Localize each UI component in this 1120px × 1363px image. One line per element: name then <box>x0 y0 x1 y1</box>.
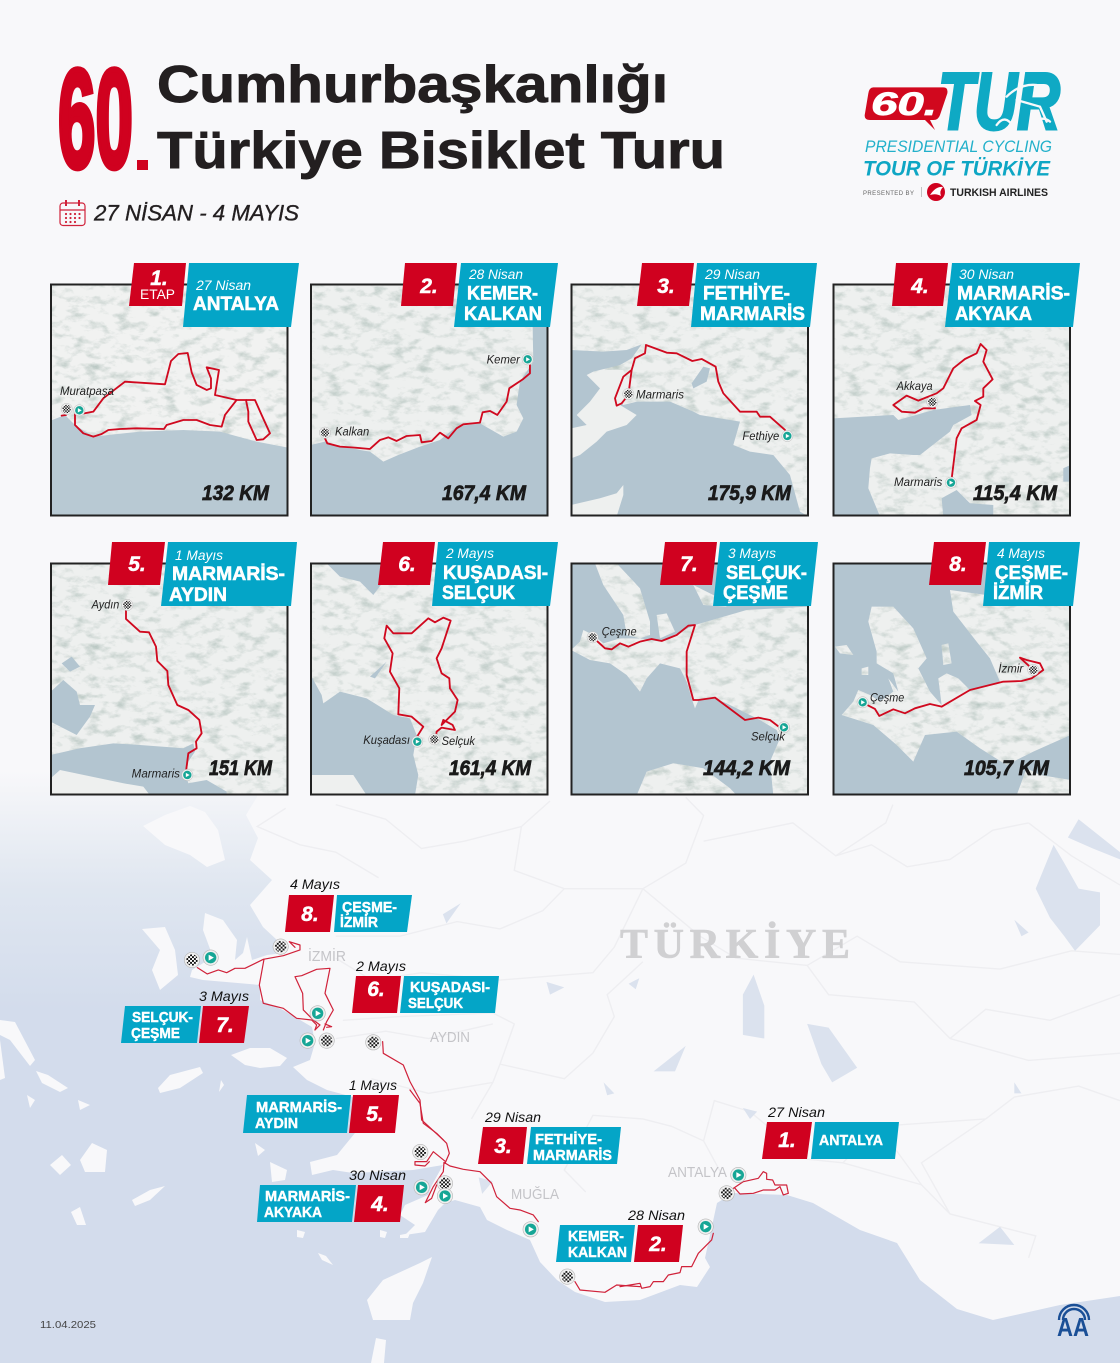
distance 5: 151 KM <box>209 757 272 780</box>
distance 1: 132 KM <box>202 482 269 505</box>
map: stage 1: Muratpaşa <box>60 384 114 398</box>
distance 4: 115,4 KM <box>973 482 1057 505</box>
overview label: stage 7: 7. <box>216 1014 234 1037</box>
overview label: stage 2: 28 Nisan <box>627 1207 685 1223</box>
overview label: stage 7: 3 Mayıs <box>199 988 249 1004</box>
stage badge 3 <box>637 263 694 306</box>
country name: Türkiye: TÜRKİYE <box>620 921 850 968</box>
stage tab 8 <box>983 542 1080 606</box>
distance 2: 167,4 KM <box>442 482 526 505</box>
overview label: stage 1: 27 Nisan <box>767 1104 825 1120</box>
map: stage 4: Akkaya <box>896 379 933 393</box>
panel: stage 4 Marmaris-Akyaka <box>833 263 1080 516</box>
stage badge 1: ETAP <box>140 286 175 302</box>
stage tab 3: FETHİYE- <box>703 284 790 304</box>
stage tab 5: 1 Mayıs <box>175 547 223 563</box>
stage tab 5: MARMARİS- <box>172 564 285 585</box>
map: stage 6 <box>311 563 548 795</box>
overview label: stage 8: İZMİR <box>340 914 378 931</box>
stage badge 7 <box>660 542 717 585</box>
title: edition number <box>58 40 148 197</box>
province borders and lakes <box>257 797 1120 1258</box>
overview routes: stages 1 and 2 <box>620 1167 788 1288</box>
overview label: stage 1 <box>762 1104 899 1159</box>
overview routes: stages 3 and 4 <box>410 1090 640 1292</box>
stage badge 6: 6. <box>398 553 416 576</box>
stage badge 7: 7. <box>680 553 698 576</box>
overview label: stage 4: 30 Nisan <box>349 1167 406 1183</box>
panel: stage 8 Çeşme-İzmir <box>833 542 1080 795</box>
overview label: stage 1: ANTALYA <box>819 1132 883 1149</box>
region name: İzmir: İZMİR <box>308 947 346 965</box>
stage badge 6 <box>378 542 435 585</box>
overview label: stage 3 <box>478 1109 621 1164</box>
overview label: stage 8: 8. <box>301 903 319 926</box>
stage tab 6: KUŞADASI- <box>443 563 548 584</box>
overview label: stage 5: MARMARİS- <box>256 1099 342 1116</box>
Greek islands <box>0 806 432 1363</box>
stage badge 1: 1. <box>150 267 168 290</box>
map: stage 7 <box>571 563 808 795</box>
stage tab 6 <box>432 542 558 606</box>
map: stage 8: İzmir <box>998 661 1024 675</box>
stage tab 8: İZMİR <box>993 583 1043 604</box>
map: stage 7: Çeşme <box>602 625 637 639</box>
overview label: stage 1: 1. <box>778 1129 796 1152</box>
overview label: stage 8: 4 Mayıs <box>290 876 340 892</box>
map: stage 7: Selçuk <box>751 730 786 744</box>
stage tab 5 <box>161 542 297 606</box>
overview label: stage 8 <box>285 876 412 932</box>
logo: Tour of Türkiye: TOUR OF TÜRKİYE <box>863 158 1051 180</box>
map: stage 4 <box>833 284 1071 516</box>
region name: Aydın: AYDIN <box>430 1029 470 1046</box>
logo: Tour of Türkiye <box>863 57 1060 201</box>
icon: calendar <box>60 200 85 226</box>
stage tab 4: 30 Nisan <box>959 266 1014 282</box>
stage tab 3: MARMARİS <box>700 304 805 325</box>
overview label: stage 7: ÇEŞME <box>131 1025 180 1042</box>
logo: Tour of Türkiye: PRESENTED BY <box>863 191 914 197</box>
panel: stage 1 Antalya <box>51 263 299 516</box>
overview label: stage 6: 2 Mayıs <box>355 958 406 974</box>
distance 7: 144,2 KM <box>703 757 790 780</box>
stage tab 1 <box>183 263 299 327</box>
stage tab 7 <box>713 542 818 606</box>
map: stage 5 <box>51 563 288 795</box>
region name: Antalya: ANTALYA <box>668 1164 727 1181</box>
stage tab 4: MARMARİS- <box>957 284 1070 304</box>
stage badge 4 <box>892 263 948 306</box>
stage tab 2: KEMER- <box>467 284 538 304</box>
map: stage 5: Marmaris <box>132 767 180 781</box>
logo: Tour of Türkiye: TUR <box>938 57 1060 147</box>
date stamp: 11.04.2025 <box>40 1319 96 1331</box>
map: stage 2: Kalkan <box>335 425 370 439</box>
stage badge 5 <box>108 542 165 585</box>
map: stage 1 <box>51 284 288 516</box>
overview label: stage 8: ÇEŞME- <box>342 899 397 916</box>
stage tab 7: 3 Mayıs <box>728 545 776 561</box>
stage badge 8 <box>929 542 986 585</box>
stage tab 6: SELÇUK <box>442 583 515 604</box>
panel: stage 5 Marmaris-Aydın <box>51 542 297 795</box>
overview label: stage 4: MARMARİS- <box>265 1188 350 1205</box>
overview label: stage 5 <box>243 1077 399 1133</box>
title: main heading: Cumhurbaşkanlığı <box>157 56 668 114</box>
stage tab 4: AKYAKA <box>955 304 1032 325</box>
stage tab 8: ÇEŞME- <box>995 563 1068 584</box>
stage badge 2: 2. <box>419 275 438 298</box>
stage badge 2 <box>401 263 457 306</box>
stage badge 4: 4. <box>910 275 929 298</box>
logo: Tour of Türkiye: PRESIDENTIAL CYCLING <box>865 137 1052 156</box>
logo: Anadolu Agency: AA <box>1057 1312 1089 1342</box>
stage tab 7: SELÇUK- <box>726 563 807 584</box>
stage tab 1: ANTALYA <box>193 294 279 315</box>
map: stage 8 <box>833 563 1071 795</box>
overview label: stage 5: 5. <box>366 1103 384 1126</box>
overview label: stage 4 <box>257 1167 406 1222</box>
panel: stage 2 Kemer-Kalkan <box>311 263 558 516</box>
distance 6: 161,4 KM <box>449 757 531 780</box>
map: stage 2 <box>311 284 548 516</box>
overview label: stage 2: KALKAN <box>568 1244 627 1261</box>
overview label: stage 3: 3. <box>494 1135 512 1158</box>
overview label: stage 3: MARMARİS <box>533 1147 612 1164</box>
map: stage 3 <box>571 284 808 516</box>
overview label: stage 3: FETHİYE- <box>535 1131 602 1148</box>
map: stage 2: Kemer <box>487 352 521 366</box>
overview label: stage 6: 6. <box>367 978 385 1001</box>
map: stage 3: Fethiye <box>742 429 780 443</box>
stage badge 5: 5. <box>128 553 146 576</box>
overview label: stage 2: KEMER- <box>568 1228 624 1245</box>
stage tab 2: KALKAN <box>464 304 542 325</box>
distance 8: 105,7 KM <box>964 757 1049 780</box>
date range: 27 NİSAN - 4 MAYIS <box>93 200 299 226</box>
stage tab 2: 28 Nisan <box>468 266 523 282</box>
stage badge 8: 8. <box>949 553 967 576</box>
stage tab 1: 27 Nisan <box>195 277 251 293</box>
logo: Tour of Türkiye: 60. <box>871 86 937 122</box>
title: main heading <box>157 56 725 180</box>
overview label: stage 3: 29 Nisan <box>484 1109 541 1125</box>
stage badge 3: 3. <box>657 275 675 298</box>
panel: stage 3 Fethiye-Marmaris <box>571 263 817 516</box>
overview label: stage 4: AKYAKA <box>264 1204 322 1221</box>
overview label: stage 6: KUŞADASI- <box>410 979 490 996</box>
overview label: stage 7 <box>121 988 249 1043</box>
stage tab 3 <box>691 263 817 327</box>
panel: stage 6 Kuşadası-Selçuk <box>311 542 558 795</box>
overview label: stage 6: SELÇUK <box>408 995 463 1012</box>
overview label: stage 6 <box>352 958 499 1013</box>
stage tab 8: 4 Mayıs <box>997 545 1045 561</box>
stage tab 2 <box>454 263 558 327</box>
map: stage 3: Marmaris <box>636 387 684 401</box>
stage tab 3: 29 Nisan <box>704 266 760 282</box>
overview label: stage 2: 2. <box>648 1233 667 1256</box>
panel: stage 7 Selçuk-Çeşme <box>571 542 818 795</box>
region name: Muğla: MUĞLA <box>511 1186 559 1203</box>
map: stage 4: Marmaris <box>894 475 942 489</box>
overview label: stage 4: 4. <box>370 1193 389 1216</box>
stage tab 6: 2 Mayıs <box>445 545 494 561</box>
title: edition number: 60 <box>58 40 133 197</box>
stage tab 7: ÇEŞME <box>723 583 788 604</box>
overview routes: stages 5 to 8 <box>184 939 443 1140</box>
logo: Tour of Türkiye: TURKISH AIRLINES <box>950 187 1048 199</box>
map: stage 8: Çeşme <box>870 691 905 705</box>
title: main heading: Türkiye Bisiklet Turu <box>157 122 725 180</box>
stage tab 5: AYDIN <box>169 585 227 606</box>
overview label: stage 5: 1 Mayıs <box>349 1077 397 1093</box>
distance 3: 175,9 KM <box>708 482 791 505</box>
overview label: stage 2 <box>556 1207 685 1262</box>
stage badge 1 <box>129 263 186 306</box>
overview label: stage 7: SELÇUK- <box>132 1009 193 1026</box>
map: stage 6: Kuşadası <box>363 733 410 747</box>
stage tab 4 <box>945 263 1080 327</box>
map: stage 6: Selçuk <box>442 734 476 748</box>
map: stage 5: Aydın <box>91 597 120 611</box>
overview label: stage 5: AYDIN <box>255 1115 298 1132</box>
overview map of western Türkiye <box>0 760 1120 1363</box>
